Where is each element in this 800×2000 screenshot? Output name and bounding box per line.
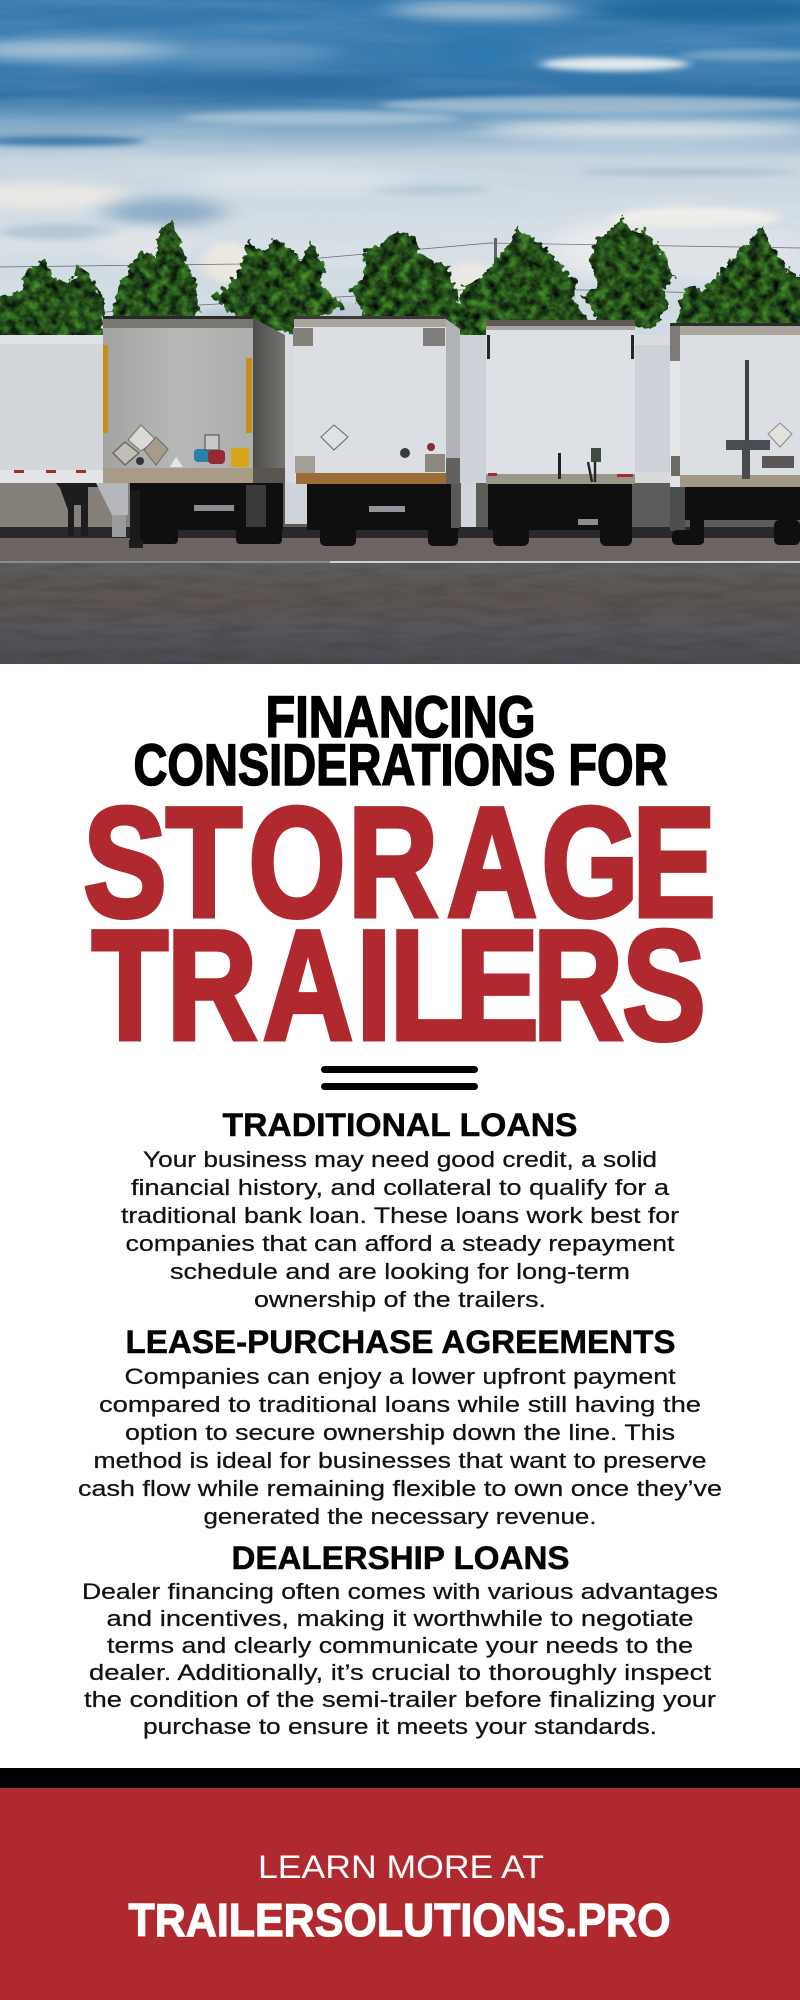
heading: lease-purchase agreements: LEASE-PURCHASE AGREEMENTS: [126, 1324, 676, 1360]
title line: Storage: STORAGE: [83, 775, 716, 949]
black band: [0, 1768, 800, 1788]
double bar divider: [321, 1066, 478, 1090]
landing gear: [56, 483, 128, 537]
power lines and pole: [0, 238, 800, 320]
body text: lease-purchase agreements: Companies can enjoy a lower upfront payment: [124, 1364, 676, 1389]
body text: lease-purchase agreements: generated the necessary revenue.: [204, 1504, 596, 1529]
title: [83, 685, 716, 1072]
body text: lease-purchase agreements: cash flow while remaining flexible to own once they’ve: [78, 1476, 722, 1501]
rear row of white trailers: [0, 335, 670, 527]
parking lot ground: [0, 483, 800, 664]
body text: traditional loans: financial history, and collateral to qualify for a: [131, 1175, 670, 1200]
body text: lease-purchase agreements: option to secure ownership down the line. This: [125, 1420, 675, 1445]
body text: dealership loans: terms and clearly communicate your needs to the: [107, 1633, 693, 1658]
trailer 1: weathered grey: [103, 316, 285, 483]
body text: lease-purchase agreements: [78, 1364, 722, 1529]
section: dealership loans: [82, 1540, 718, 1739]
body text: dealership loans: dealer. Additionally, it’s crucial to thoroughly inspect: [89, 1660, 712, 1685]
body text: dealership loans: Dealer financing often comes with various advantages: [82, 1579, 718, 1604]
body text: dealership loans: the condition of the semi-trailer before finalizing your: [84, 1687, 717, 1712]
body text: lease-purchase agreements: method is ideal for businesses that want to preserve: [94, 1448, 706, 1473]
body text: traditional loans: companies that can afford a steady repayment: [126, 1231, 675, 1256]
trailer 3: white: [486, 320, 635, 484]
sky with clouds: [0, 0, 800, 340]
section: traditional loans: [121, 1107, 680, 1312]
body text: traditional loans: ownership of the trailers.: [254, 1287, 546, 1312]
trailer undercarriages and wheels: [129, 483, 800, 548]
body text: traditional loans: [121, 1147, 680, 1312]
footer call to action: LEARN MORE AT: [258, 1849, 544, 1885]
trailer 2: white with rust: [293, 316, 460, 484]
heading: traditional loans: TRADITIONAL LOANS: [222, 1107, 578, 1143]
trailer 4: white with vertical door bar: [670, 323, 800, 487]
body text: dealership loans: [82, 1579, 718, 1739]
footer panel: [0, 1788, 800, 2000]
title line: Financing: FINANCING: [266, 685, 536, 750]
section: lease-purchase agreements: [78, 1324, 722, 1529]
body text: traditional loans: schedule and are looking for long-term: [170, 1259, 630, 1284]
body text: traditional loans: traditional bank loan. These loans work best for: [121, 1203, 680, 1228]
hero photo: storage trailers parked under a cloudy sky: [0, 0, 800, 664]
body text: dealership loans: and incentives, making it worthwhile to negotiate: [106, 1606, 694, 1631]
tree line: [0, 216, 800, 340]
body text: dealership loans: purchase to ensure it meets your standards.: [143, 1714, 657, 1739]
title line: Trailers: TRAILERS: [92, 898, 706, 1072]
footer website: TRAILERSOLUTIONS.PRO: [128, 1894, 670, 1946]
title line: Considerations for: CONSIDERATIONS FOR: [134, 733, 668, 798]
body text: lease-purchase agreements: compared to traditional loans while still having the: [99, 1392, 701, 1417]
body text: traditional loans: Your business may need good credit, a solid: [143, 1147, 657, 1172]
heading: dealership loans: DEALERSHIP LOANS: [232, 1540, 570, 1576]
